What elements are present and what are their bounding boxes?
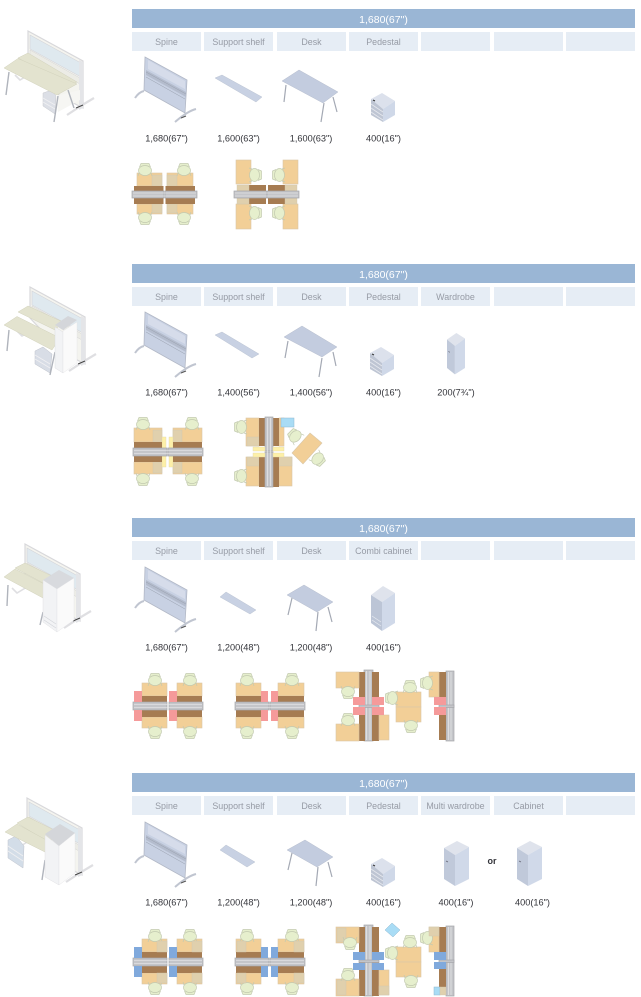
floor plan 4b [235, 930, 305, 994]
dimension labels: 400(16") [366, 388, 401, 398]
combi cabinet icon [371, 586, 395, 631]
floor plan 1a [132, 164, 197, 224]
category row: Support shelf [212, 37, 265, 47]
desk icon [287, 840, 333, 886]
spine icon [135, 822, 196, 887]
category row: Multi wardrobe [426, 801, 485, 811]
category row: Spine [155, 546, 178, 556]
category row: Spine [155, 292, 178, 302]
dimension labels [145, 898, 550, 908]
dimension labels: 400(16") [515, 898, 550, 908]
multi wardrobe icon [444, 841, 469, 886]
header bar: 1,680(67") [359, 269, 408, 281]
dimension labels: 1,400(56") [217, 388, 260, 398]
category row [132, 287, 635, 306]
floor plan 3b [235, 674, 305, 738]
section 1: 1,680 spine with 1,600 desk [4, 9, 635, 229]
dimension labels: 200(7¾") [437, 388, 475, 398]
dimension labels [145, 642, 401, 652]
dimension labels: 1,400(56") [290, 388, 332, 398]
spine icon [135, 57, 196, 122]
header bar: 1,680(67") [359, 778, 408, 790]
isometric workstation 1 [4, 31, 94, 122]
category row: Support shelf [212, 546, 265, 556]
dimension labels: 1,680(67") [145, 898, 188, 908]
pedestal icon [371, 93, 395, 122]
dimension labels: 400(16") [366, 642, 401, 652]
category row [132, 796, 635, 815]
category row [132, 541, 635, 560]
category row: Combi cabinet [355, 546, 412, 556]
section 3: 1,680 spine with 1,200 desk and combi cabinet [4, 518, 635, 741]
dimension labels: 1,200(48") [290, 898, 332, 908]
section 4: 1,680 spine with multi wardrobe or cabinet [5, 773, 635, 996]
category row: Pedestal [366, 801, 401, 811]
support shelf icon [215, 75, 262, 102]
category row: Spine [155, 801, 178, 811]
floor plan 4a [133, 930, 203, 994]
floor plan 1b [234, 160, 299, 229]
pedestal icon [371, 858, 395, 887]
floor plan 3a [133, 674, 203, 738]
or label: or [488, 856, 497, 866]
floor plan 2b [234, 417, 328, 487]
section 2: 1,680 spine with 1,400 desk [4, 264, 635, 487]
category row: Desk [301, 801, 322, 811]
support shelf icon [220, 592, 256, 614]
dimension labels: 1,680(67") [145, 642, 188, 652]
category row: Pedestal [366, 37, 401, 47]
pedestal icon [370, 347, 394, 376]
support shelf icon [215, 332, 259, 358]
dimension labels: 400(16") [366, 898, 401, 908]
category row: Support shelf [212, 292, 265, 302]
category row: Support shelf [212, 801, 265, 811]
dimension labels: 1,680(67") [145, 134, 188, 144]
desk icon [287, 585, 333, 631]
floor plan 3c [336, 670, 454, 741]
header bar: 1,680(67") [359, 523, 408, 535]
category row: Desk [301, 292, 322, 302]
dimension labels: 1,600(63") [290, 134, 332, 144]
header bar: 1,680(67") [359, 14, 408, 26]
desk icon [282, 70, 338, 122]
isometric workstation 4 [5, 798, 93, 885]
dimension labels: 400(16") [439, 898, 473, 908]
cabinet icon [517, 841, 542, 886]
wardrobe icon [447, 333, 465, 374]
header bar [132, 264, 635, 283]
dimension labels: 1,200(48") [290, 642, 332, 652]
header bar [132, 9, 635, 28]
dimension labels: 1,200(48") [217, 642, 260, 652]
spine icon [135, 312, 196, 377]
dimension labels: 1,680(67") [145, 388, 188, 398]
category row: Pedestal [366, 292, 401, 302]
desk icon [284, 326, 337, 377]
isometric workstation 2 [4, 287, 96, 375]
dimension labels: 1,600(63") [217, 134, 260, 144]
category row [132, 32, 635, 51]
category row: Desk [301, 546, 322, 556]
spine icon [135, 567, 196, 632]
dimension labels: 400(16") [366, 134, 401, 144]
isometric workstation 3 [4, 544, 91, 632]
header bar [132, 773, 635, 792]
category row: Cabinet [513, 801, 544, 811]
dimension labels: 1,200(48") [217, 898, 260, 908]
floor plan 4c [336, 923, 454, 996]
dimension labels [145, 388, 475, 398]
category row: Spine [155, 37, 178, 47]
dimension labels [145, 134, 401, 144]
category row: Desk [301, 37, 322, 47]
floor plan 2a [133, 418, 203, 486]
category row: Wardrobe [436, 292, 475, 302]
header bar [132, 518, 635, 537]
support shelf icon [220, 845, 255, 867]
